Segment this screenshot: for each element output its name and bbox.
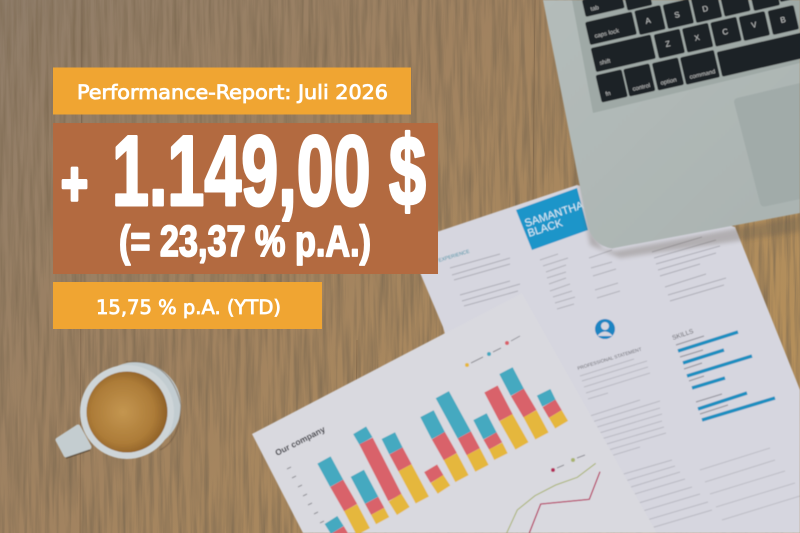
trackpad — [734, 83, 800, 207]
handle — [58, 427, 89, 455]
resume name banner: BLACK — [526, 217, 565, 240]
skills bars: SKILLS — [671, 328, 695, 342]
resume paper — [407, 185, 800, 533]
resume experience text: EXPERIENCE — [438, 249, 471, 264]
key labels: shift — [599, 59, 611, 67]
key labels: S — [673, 10, 681, 20]
key labels: command — [689, 69, 716, 81]
stacked bar chart — [324, 371, 562, 533]
key labels: A — [644, 16, 652, 26]
resume experience text — [438, 237, 726, 309]
coffee cup — [58, 362, 181, 459]
bar chart legend — [465, 336, 520, 367]
key labels: option — [660, 77, 677, 87]
key labels: V — [750, 20, 758, 30]
panel: report title — [53, 68, 411, 114]
resume name banner: SAMANTHA — [523, 199, 586, 230]
panel: main result — [53, 115, 438, 274]
line chart — [507, 455, 600, 533]
cup rim — [80, 365, 174, 459]
profit amount: 1.149,00 $ — [112, 115, 426, 226]
key labels: caps lock — [594, 28, 621, 40]
year to date text: 15,75 % p.A. (YTD) — [96, 296, 281, 319]
report title text: Performance-Report: Juli 2026 — [77, 81, 388, 104]
coffee — [86, 372, 168, 452]
key labels: C — [721, 27, 729, 37]
plus sign: + — [61, 150, 88, 219]
professional statement text: PROFESSIONAL STATEMENT — [577, 347, 643, 372]
key labels: tab — [590, 5, 600, 13]
laptop — [543, 0, 800, 258]
resume profile icon — [595, 319, 615, 339]
key labels: B — [779, 15, 787, 25]
key labels: fn — [605, 91, 611, 98]
keyboard well — [572, 0, 800, 113]
chart paper — [252, 293, 657, 533]
chart heading: Our company — [273, 424, 327, 458]
annualised return: (= 23,37 % p.A.) — [119, 217, 371, 266]
key labels: D — [701, 4, 709, 14]
key labels — [590, 4, 787, 98]
key labels: control — [632, 83, 651, 93]
panel: year to date — [53, 282, 322, 329]
saucer — [91, 362, 181, 450]
skills bars — [671, 328, 775, 420]
professional statement text — [577, 347, 800, 533]
bar chart axis ticks — [287, 467, 324, 523]
resume name banner — [516, 188, 588, 250]
key labels: Z — [664, 39, 671, 49]
keyboard keys — [582, 0, 800, 103]
key labels: X — [693, 33, 701, 43]
